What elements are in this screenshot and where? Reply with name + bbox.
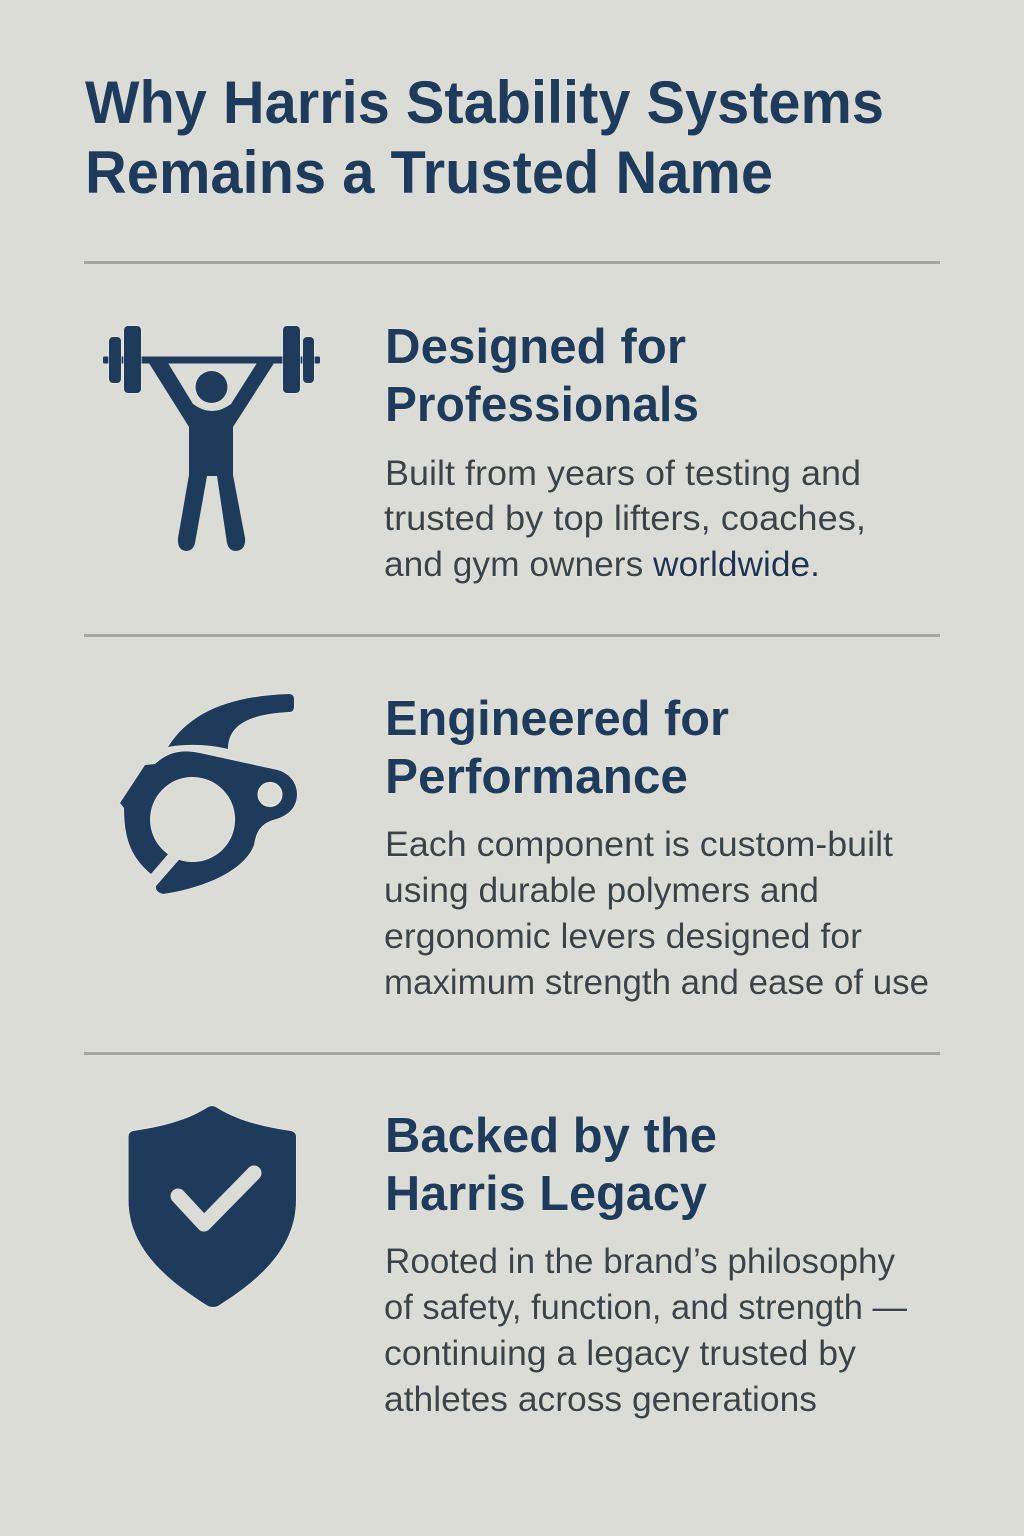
icon: barbell clamp <box>120 694 297 894</box>
heading: engineered for performance: Performance <box>385 750 688 804</box>
title <box>85 69 884 206</box>
heading: backed by the harris legacy <box>385 1109 717 1221</box>
text: engineered for performance <box>384 825 929 1002</box>
panel: designed for professionals <box>103 320 866 584</box>
text: engineered for performance: Each component is custom-built <box>385 825 893 864</box>
text: backed by the harris legacy <box>384 1242 907 1419</box>
text: backed by the harris legacy: athletes across generations <box>384 1380 817 1419</box>
heading: engineered for performance: Engineered for <box>385 692 729 746</box>
text: engineered for performance: using durable polymers and <box>384 871 819 910</box>
heading: backed by the harris legacy: Backed by the <box>385 1109 717 1163</box>
text: backed by the harris legacy: Rooted in the brand’s philosophy <box>385 1242 895 1281</box>
text: engineered for performance: ergonomic levers designed for <box>384 917 862 956</box>
title: Why Harris Stability Systems <box>85 69 884 136</box>
panel: engineered for performance <box>120 692 929 1002</box>
text: engineered for performance: maximum strength and ease of use <box>384 963 929 1002</box>
title: Remains a Trusted Name <box>85 139 773 206</box>
heading: designed for professionals: Designed for <box>385 320 686 374</box>
panel: backed by the harris legacy <box>128 1106 907 1419</box>
text: designed for professionals: trusted by top lifters, coaches, <box>384 499 866 538</box>
text: designed for professionals: and gym owners worldwide. <box>384 545 820 584</box>
icon: weightlifter <box>103 326 320 551</box>
text: backed by the harris legacy: continuing a legacy trusted by <box>384 1334 856 1373</box>
heading: engineered for performance <box>385 692 729 804</box>
text: designed for professionals: Built from years of testing and <box>385 454 861 493</box>
heading: designed for professionals: Professionals <box>385 378 699 432</box>
heading: designed for professionals <box>385 320 699 432</box>
text: designed for professionals <box>384 454 866 584</box>
heading: backed by the harris legacy: Harris Legacy <box>385 1167 707 1221</box>
icon: shield with checkmark <box>128 1106 296 1307</box>
text: backed by the harris legacy: of safety, function, and strength — <box>384 1288 907 1327</box>
